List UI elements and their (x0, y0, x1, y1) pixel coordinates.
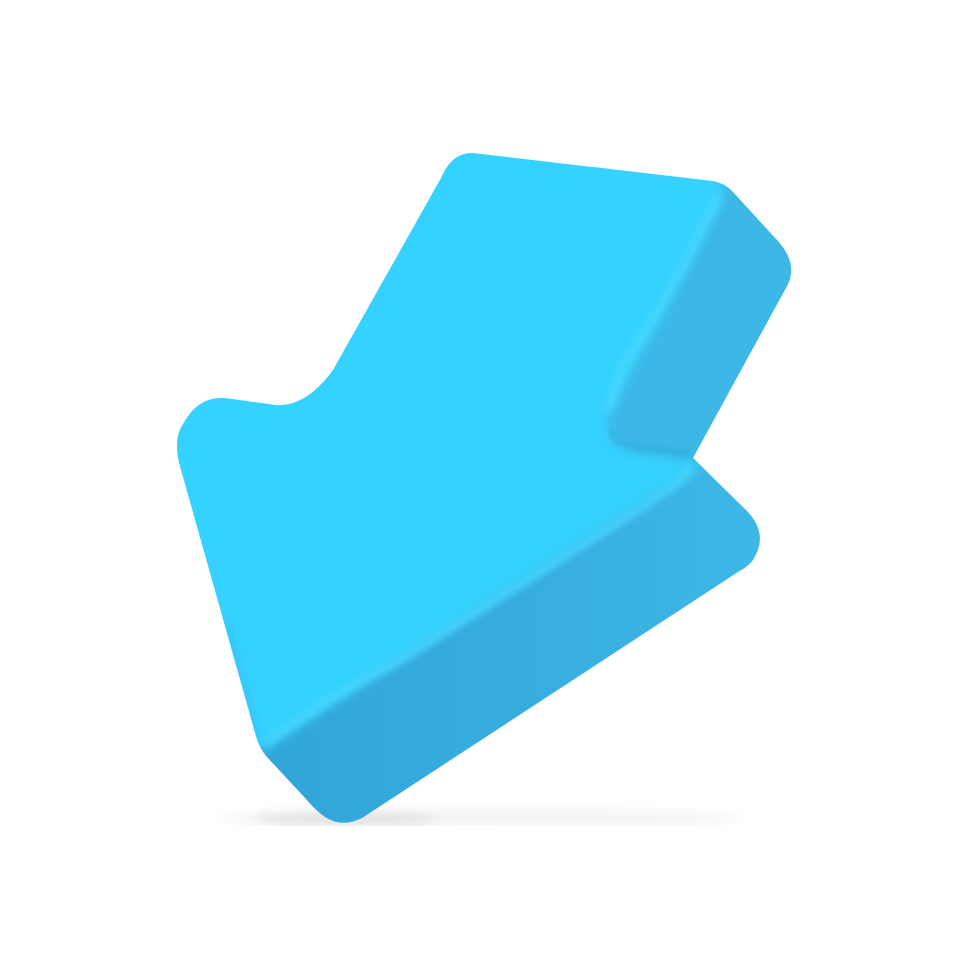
front face: arrow top surface (176, 153, 726, 753)
highlight: bevel along upper shaft edge (607, 195, 719, 412)
left edge soft shade near the tip (225, 620, 258, 745)
illustration: 3D blue arrow (176, 153, 792, 826)
ground shadow (218, 811, 742, 825)
side face: upper shaft (590, 166, 792, 470)
inner corner shade (612, 434, 688, 456)
arrow body (176, 153, 792, 823)
highlight: bevel along lower edge (264, 466, 692, 744)
side face: arrowhead lower (250, 458, 760, 823)
